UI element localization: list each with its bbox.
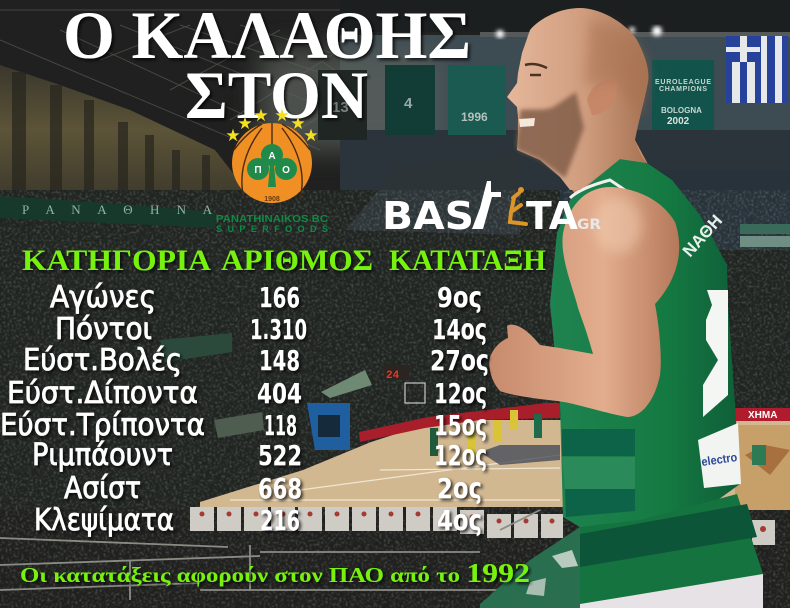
championship banners: CHAMPIONS — [659, 86, 707, 93]
court — [200, 420, 790, 507]
armhole trim — [570, 180, 672, 222]
table header: ΚΑΤΑΤΑΞΗ — [389, 244, 546, 277]
shorts — [580, 494, 763, 608]
jersey dark bands — [562, 429, 635, 517]
table column: rankings: 12ος — [434, 377, 487, 410]
championship banners: 2002 — [667, 116, 690, 127]
head — [507, 8, 648, 190]
upper deck banner — [0, 196, 215, 228]
table column: totals: 668 — [258, 472, 302, 505]
table column: totals — [250, 281, 307, 537]
arm highlight — [594, 197, 642, 253]
table column: totals: 148 — [259, 344, 300, 377]
championship banners: 1996 — [461, 110, 488, 124]
table column: categories: Ριμπάουντ — [32, 438, 173, 473]
logo: panathinaikos: Α — [268, 151, 276, 162]
table column: rankings: 12ος — [434, 439, 487, 472]
logo: panathinaikos: SUPERFOODS — [216, 224, 328, 234]
adidas flag — [480, 527, 580, 608]
arena banners — [160, 224, 790, 438]
logo: panathinaikos: 1908 — [264, 196, 280, 203]
championship banners — [318, 60, 714, 140]
table column: categories: Αγώνες — [50, 280, 156, 315]
title — [63, 0, 471, 133]
logo: panathinaikos: Ο — [282, 165, 290, 176]
railings — [0, 510, 580, 600]
logo: panathinaikos: ★ — [303, 126, 319, 146]
table column: rankings: 27ος — [430, 344, 489, 377]
table column: categories: Πόντοι — [55, 312, 152, 347]
jersey name and number: ΝΑΘΗ — [679, 211, 726, 261]
arm — [489, 187, 679, 417]
table header: ΑΡΙΘΜΟΣ — [221, 244, 373, 277]
sponsor patch — [698, 423, 741, 488]
logo: basketa.gr: GR — [577, 217, 601, 233]
logo: panathinaikos: ★ — [237, 114, 253, 134]
neck — [562, 110, 650, 200]
table column: totals: 404 — [257, 377, 302, 410]
table column: totals: 216 — [260, 504, 300, 537]
championship banners: 4 — [404, 95, 413, 112]
logo: panathinaikos: ★ — [290, 114, 306, 134]
table column: categories: Εύστ.Τρίποντα — [0, 408, 205, 443]
jersey — [550, 159, 740, 528]
table column: categories — [0, 280, 205, 538]
scalp shading — [585, 20, 647, 118]
seats — [190, 507, 775, 545]
table column: rankings: 2ος — [437, 472, 482, 505]
background: arena photo: P A N A Θ H N A — [22, 202, 213, 217]
table header: ΚΑΤΗΓΟΡΙΑ — [22, 244, 211, 277]
right upper arena — [340, 35, 790, 145]
table column: totals: 166 — [259, 281, 300, 314]
crowd bands — [0, 190, 790, 510]
footnote: Οι κατατάξεις αφορούν στον ΠΑΟ από το 1992 — [20, 558, 530, 588]
table header — [22, 244, 546, 277]
icon: greek flag — [726, 36, 788, 103]
table column: totals: 118 — [264, 409, 297, 442]
logo: basketa.gr: BAS — [382, 194, 474, 238]
icon: dunking player — [510, 188, 526, 224]
table column: rankings — [430, 281, 489, 537]
table column: categories: Εύστ.Βολές — [23, 343, 182, 378]
player figure: electro — [700, 450, 738, 469]
championship banners: BOLOGNA — [661, 106, 702, 115]
table column: categories: Εύστ.Δίποντα — [7, 376, 198, 411]
table column: rankings: 4ος — [437, 504, 482, 537]
table column: totals: 1.310 — [250, 313, 307, 346]
table column: categories: Κλεψίματα — [34, 503, 174, 538]
logo: panathinaikos: Π — [254, 165, 262, 176]
table column: categories: Ασίστ — [64, 471, 141, 506]
left wall — [0, 65, 250, 195]
logo: panathinaikos: PANATHINAIKOS BC — [216, 214, 328, 225]
championship banners: EUROLEAGUE — [655, 79, 711, 86]
championship banners: 13 — [332, 99, 349, 116]
crowd texture — [0, 190, 790, 608]
logo: panathinaikos — [216, 106, 328, 234]
logo: panathinaikos: ★ — [253, 106, 269, 126]
logo: panathinaikos: ★ — [274, 106, 290, 126]
ceiling — [0, 0, 790, 190]
background: arena photo: 24 — [386, 370, 400, 382]
small players — [430, 410, 766, 465]
ceiling trusses — [0, 10, 500, 150]
stubble — [516, 92, 584, 178]
scoreboard and basket — [384, 365, 409, 380]
mouth — [519, 118, 535, 127]
table column: rankings: 15ος — [434, 409, 487, 442]
logo: basketa.gr — [382, 181, 601, 238]
ceiling lights — [496, 26, 662, 38]
title: ΣΤΟΝ — [185, 57, 368, 133]
table column: rankings: 9ος — [437, 281, 482, 314]
eye and brow — [525, 64, 547, 75]
ear — [587, 80, 617, 115]
table column: rankings: 14ος — [432, 313, 487, 346]
background: arena photo: ΧΗΜΑ — [748, 410, 777, 421]
table column: totals: 522 — [258, 439, 302, 472]
logo: basketa.gr: TA — [526, 194, 579, 238]
advertising boards — [359, 403, 560, 442]
logo: panathinaikos: ★ — [225, 126, 241, 146]
player figure — [489, 8, 763, 608]
